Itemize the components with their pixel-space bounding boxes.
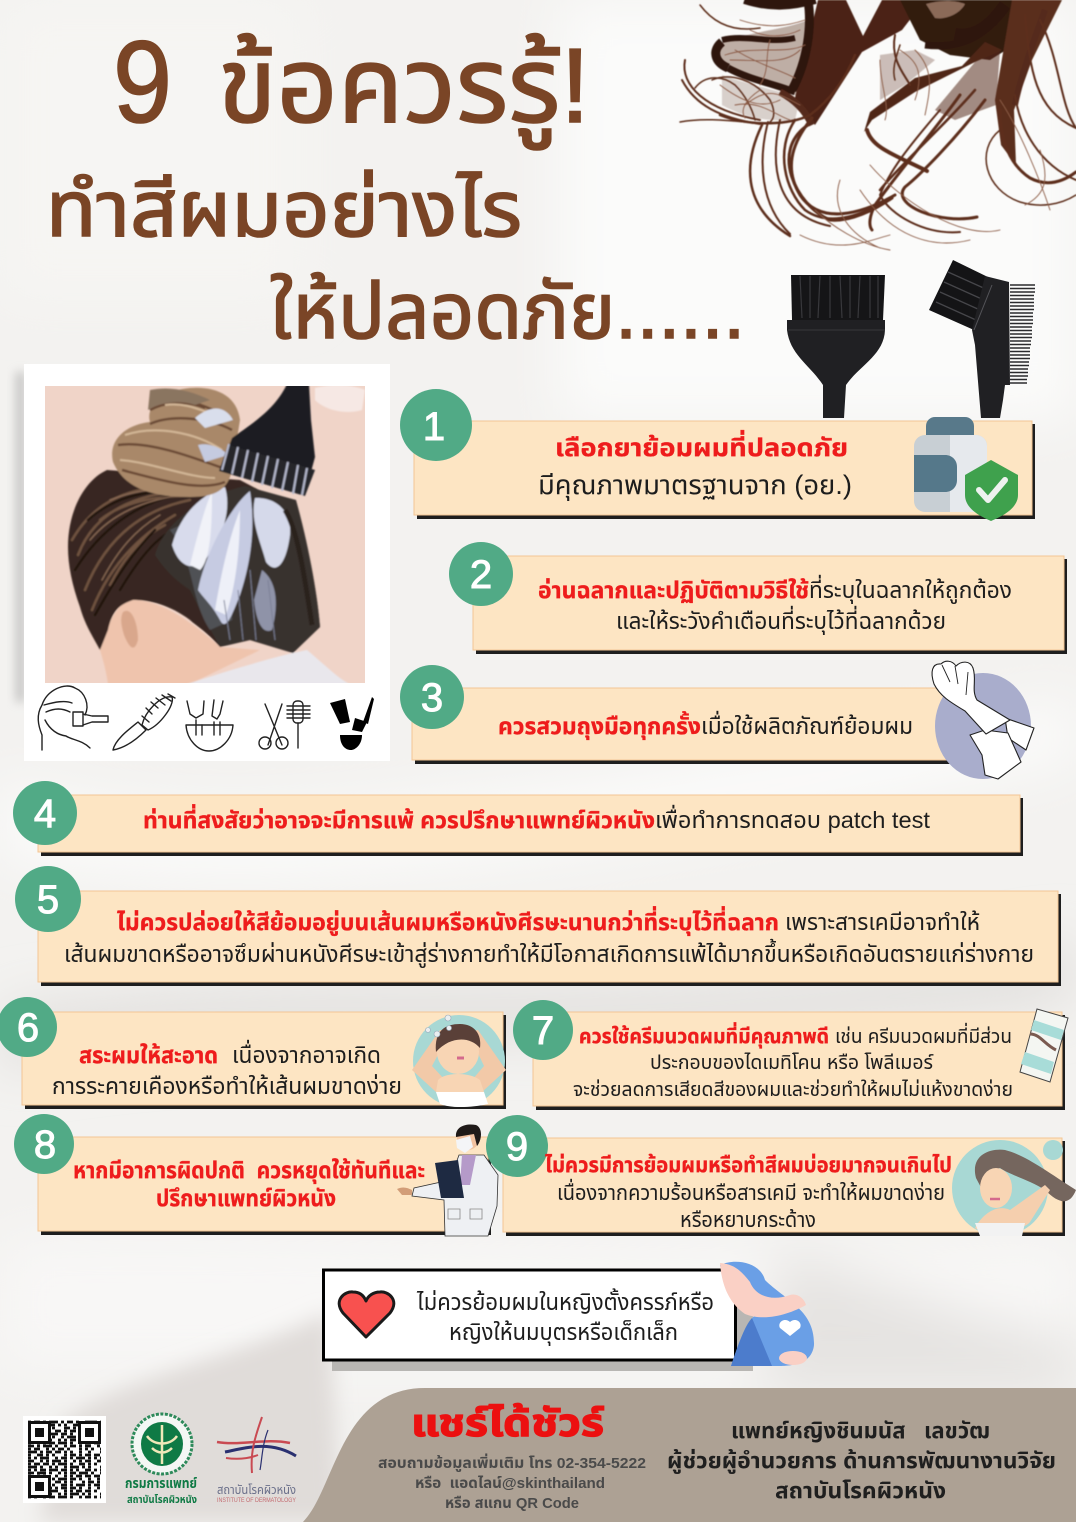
badge 8: 8: [34, 1123, 56, 1167]
icon: pregnant woman: [720, 1262, 814, 1366]
badge 3: 3: [421, 676, 443, 720]
title: 9: [113, 17, 172, 147]
logo: Institute of Dermatology: [217, 1417, 296, 1504]
badge 1: 1: [423, 405, 445, 449]
QR code: [23, 1416, 106, 1503]
logo: Department of Medical Services: [125, 1414, 197, 1506]
text: tip 5: ไม่ควรปล่อยให้สีย้อมอยู่บนเส้นผมหรือหนังศีรษะนานกว่าที่ระบุไว้ที่ฉลาก: [117, 906, 779, 936]
badge 7: 7: [532, 1009, 554, 1053]
badge 9: 9: [506, 1125, 528, 1169]
title: [46, 17, 745, 355]
text: tip 2: และให้ระวังคำเตือนที่ระบุไว้ที่ฉลากด้วย: [616, 605, 946, 635]
badge 5: [15, 866, 81, 932]
icon: woman washing hair: [412, 1015, 506, 1107]
callout: no dyeing in pregnancy: [324, 1262, 814, 1371]
hair masses: [718, 0, 1062, 165]
footer: contact details: หรือ แอดไลน์@skinthailand: [415, 1475, 605, 1492]
badge 1: [400, 389, 472, 461]
panel: tip 5 box: [38, 891, 1061, 986]
icon: mixing bowl: [186, 700, 233, 751]
icon: solid dye tube and bowl: [330, 697, 374, 750]
text: callout: [416, 1287, 714, 1346]
text: tip 6: สระผมให้สะอาด: [79, 1042, 218, 1068]
tip 9: [486, 1115, 1076, 1236]
icon: head with dye brush: [38, 686, 108, 750]
tip 3: [400, 661, 1034, 779]
icon: round hair brush: [113, 694, 175, 750]
text: tip 4: ท่านที่สงสัยว่าอาจจะมีการแพ้ ควรปรึกษาแพทย์ผิวหนัง: [143, 804, 655, 833]
text: tip 3: [498, 710, 913, 740]
text: tip 2: [538, 574, 1012, 635]
text: tip 1: มีคุณภาพมาตรฐานจาก (อย.): [538, 470, 852, 501]
dark masses at the top edge: [716, 0, 1005, 92]
photo: hair dye being applied: [45, 384, 365, 684]
text: tip 7: เช่น ครีมนวดผมที่มีส่วน: [835, 1022, 1012, 1048]
image: dye brush with comb: [929, 260, 1035, 418]
badge 5: 5: [37, 878, 59, 922]
panel: tip 7 box: [533, 1012, 1065, 1110]
text: tip 5: [64, 906, 1034, 969]
text: tip 7: [573, 1022, 1013, 1101]
panel: polaroid photo frame: [16, 364, 390, 761]
main hair: [68, 470, 320, 653]
tip 4: [13, 781, 1023, 856]
tip 1: [400, 389, 1035, 521]
logo: Department of Medical Services: สถาบันโรคผิวหนัง: [127, 1494, 197, 1506]
text: tip 8: หากมีอาการผิดปกติ ควรหยุดใช้ทันทีและ: [73, 1157, 425, 1184]
footer: contact details: สอบถามข้อมูลเพิ่มเติม โทร 02-354-5222: [378, 1453, 646, 1473]
text: tip 4: [143, 804, 931, 833]
panel: tip 6 box: [22, 1012, 506, 1109]
icon: bottle with shield: [914, 417, 1018, 521]
icon: conditioner tube: [1020, 1009, 1068, 1082]
dyed section: [155, 486, 320, 653]
text: tip 6: เนื่องจากอาจเกิด: [232, 1039, 381, 1068]
badge 4: [13, 781, 77, 845]
badge 2: [449, 542, 513, 606]
footer: author credit: แพทย์หญิงชินมนัส เลขวัฒ: [731, 1418, 990, 1443]
badge 9: [486, 1115, 548, 1177]
tip 5: [15, 866, 1061, 986]
footer: contact details: หรือ สแกน QR Code: [445, 1495, 579, 1512]
icon: woman touching hair: [952, 1140, 1076, 1236]
text: tip 2: อ่านฉลากและปฏิบัติตามวิธีใช้: [538, 577, 809, 603]
icon: doctor with clipboard: [397, 1124, 498, 1236]
badge 2: 2: [470, 553, 492, 597]
tip 8: [14, 1114, 498, 1236]
title: ข้อควรรู้!: [218, 27, 590, 150]
tip 7: [513, 1000, 1068, 1110]
text: tip 3: เมื่อใช้ผลิตภัณฑ์ย้อมผม: [701, 710, 913, 739]
panel: tip 1 box: [414, 421, 1035, 519]
footer: share brand: แชร์ได้ชัวร์: [411, 1403, 604, 1445]
logo: Institute of Dermatology: INSTITUTE OF DERMATOLOGY: [217, 1498, 296, 1504]
brush in photo: [229, 386, 316, 470]
skin: [100, 600, 260, 684]
long strands: [680, 5, 1076, 236]
panel: tip 2 box: [473, 556, 1067, 654]
text: tip 8: ปรึกษาแพทย์ผิวหนัง: [156, 1185, 336, 1211]
footer: author credit: สถาบันโรคผิวหนัง: [775, 1478, 946, 1503]
icons: salon tools row: [38, 686, 374, 751]
footer: author credit: [667, 1418, 1056, 1503]
text: tip 9: [545, 1154, 952, 1232]
text: tip 3: ควรสวมถุงมือทุกครั้ง: [498, 711, 701, 740]
thick brown bundles: [780, 10, 1045, 125]
panel: tip 3 box: [412, 688, 985, 764]
badge 8: [14, 1114, 74, 1174]
footer band: [303, 1388, 1076, 1522]
text: tip 1: เลือกยาย้อมผมที่ปลอดภัย: [555, 430, 848, 462]
footer: author credit: ผู้ช่วยผู้อำนวยการ ด้านการพัฒนางานวิจัย: [667, 1448, 1056, 1474]
text: tip 9: เนื่องจากความร้อนหรือสารเคมี จะทำให้ผมขาดง่าย: [557, 1178, 945, 1205]
fine lighter strands: [720, 20, 1050, 250]
text: tip 9: หรือหยาบกระด้าง: [680, 1208, 816, 1232]
text: tip 4: เพื่อทำการทดสอบ patch test: [655, 804, 931, 833]
text: tip 7: ประกอบของไดเมทิโคน หรือ โพลีเมอร์: [650, 1052, 934, 1074]
image: loose brown hair strands: [680, 0, 1076, 250]
logo: Institute of Dermatology: สถาบันโรคผิวหนัง: [217, 1483, 296, 1497]
badge 4: 4: [34, 792, 56, 836]
icon: scissors and brush: [259, 701, 310, 749]
text: tip 7: จะช่วยลดการเสียดสีของผมและช่วยทำให้ผมไม่แห้งขาดง่าย: [573, 1078, 1013, 1101]
text: tip 5: เพราะสารเคมีอาจทำให้: [785, 909, 980, 935]
text: tip 9: ไม่ควรมีการย้อมผมหรือทำสีผมบ่อยมากจนเกินไป: [545, 1154, 952, 1177]
panel: tip 8 box: [38, 1137, 491, 1235]
panel: tip 4 box: [38, 795, 1023, 856]
text: tip 2: ที่ระบุในฉลากให้ถูกต้อง: [809, 574, 1012, 605]
text: tip 6: การระคายเคืองหรือทำให้เส้นผมขาดง่าย: [52, 1073, 402, 1099]
title: ทำสีผมอย่างไร: [46, 165, 522, 253]
badge 6: [0, 997, 57, 1057]
footer: contact details: [378, 1453, 646, 1512]
text: tip 5: เส้นผมขาดหรืออาจซึมผ่านหนังศีรษะเข้าสู่ร่างกายทำให้มีโอกาสเกิดการแพ้ได้มากขึ้นหรือเกิดอันตรายแก่ร่างกาย: [64, 938, 1034, 969]
text: tip 8: [73, 1157, 425, 1211]
icon: putting on gloves: [932, 661, 1034, 779]
tip 6: [0, 997, 506, 1109]
logo: Department of Medical Services: กรมการแพทย์: [125, 1475, 197, 1491]
hair bun: [112, 388, 240, 497]
badge 6: 6: [17, 1006, 39, 1050]
panel: tip 9 box: [503, 1138, 1065, 1236]
tip 2: [449, 542, 1067, 654]
cape: [187, 650, 350, 684]
text: tip 1: [538, 430, 852, 501]
text: callout: หญิงให้นมบุตรหรือเด็กเล็ก: [449, 1319, 678, 1346]
image: flat dye brush: [787, 275, 885, 418]
badge 3: [400, 665, 464, 729]
text: tip 7: ควรใช้ครีมนวดผมที่มีคุณภาพดี: [579, 1022, 829, 1048]
text: tip 6: [52, 1039, 402, 1099]
title: ให้ปลอดภัย......: [270, 267, 745, 355]
icon: heart: [339, 1292, 394, 1337]
badge 7: [513, 1000, 573, 1060]
text: callout: ไม่ควรย้อมผมในหญิงตั้งครรภ์หรือ: [416, 1287, 714, 1315]
